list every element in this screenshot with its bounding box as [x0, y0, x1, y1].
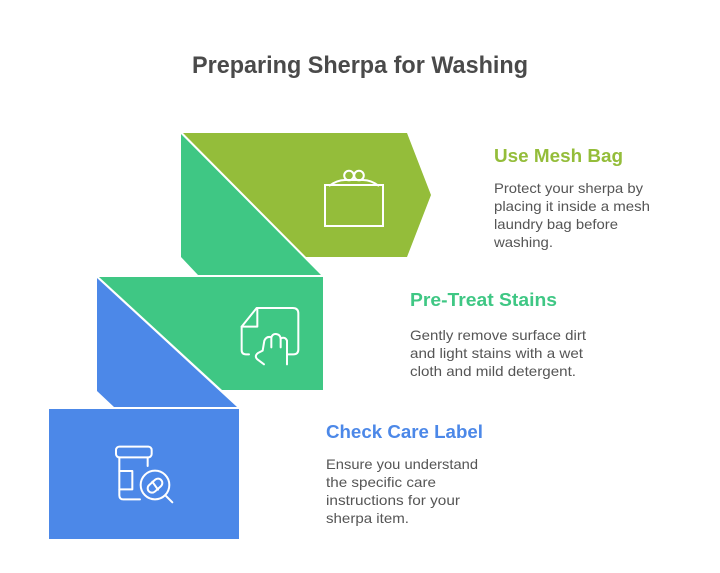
icon: hand on cloth	[242, 308, 298, 364]
text block: pre-treat stains: Gently remove surface dirt	[410, 327, 586, 343]
text block: pre-treat stains: cloth and mild detergent.	[410, 363, 576, 379]
panel: pre-treat stains shape	[99, 277, 323, 390]
text block: check care label: the specific care	[326, 474, 436, 490]
heading: use mesh bag: Use Mesh Bag	[494, 146, 623, 166]
text block: use mesh bag: placing it inside a mesh	[494, 198, 650, 214]
text block: pre-treat stains: and light stains with a wet	[410, 345, 583, 361]
title: Preparing Sherpa for Washing	[192, 52, 528, 79]
text block: check care label: instructions for your	[326, 492, 460, 508]
icon: pill bottle with magnifier	[116, 447, 172, 502]
icon: mesh bag	[325, 171, 383, 226]
panel: check care label shape	[49, 409, 239, 539]
panel: teal fold under mesh bag	[181, 134, 321, 275]
text block: check care label	[326, 456, 478, 526]
panel: use mesh bag shape	[183, 133, 431, 257]
text block: check care label: Ensure you understand	[326, 456, 478, 472]
heading: pre-treat stains: Pre-Treat Stains	[410, 290, 557, 310]
text block: use mesh bag	[493, 180, 650, 250]
text block: use mesh bag: Protect your sherpa by	[494, 180, 643, 196]
text block: use mesh bag: washing.	[493, 234, 553, 250]
text block: check care label: sherpa item.	[326, 510, 409, 526]
panel: blue fold under pre-treat	[97, 278, 237, 407]
text block: use mesh bag: laundry bag before	[494, 216, 618, 232]
heading: check care label: Check Care Label	[326, 422, 483, 442]
text block: pre-treat stains	[410, 327, 586, 379]
